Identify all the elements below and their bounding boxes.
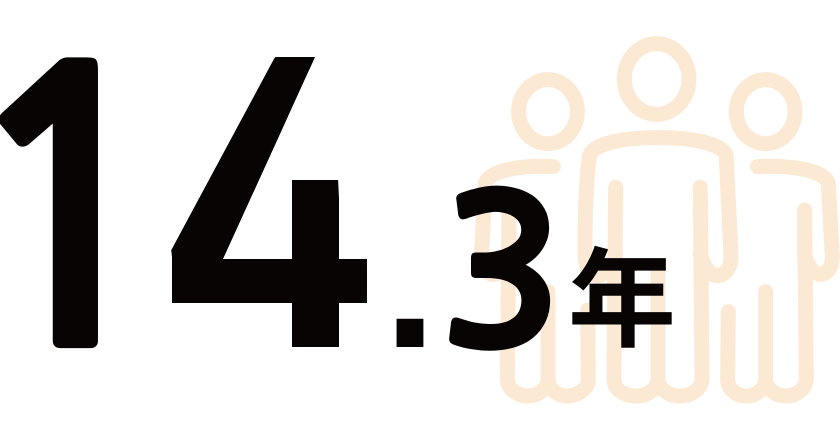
digit 4: 4 <box>153 27 391 431</box>
icon: left person <box>481 80 588 396</box>
digit 3: 3 <box>440 173 564 377</box>
icon: three people outline <box>481 44 832 396</box>
unit: year: 年 <box>568 214 676 370</box>
icon: centre person <box>585 44 731 396</box>
number: 14.3 <box>0 57 550 351</box>
decimal point: . <box>384 176 436 388</box>
icon: right person <box>728 80 832 396</box>
